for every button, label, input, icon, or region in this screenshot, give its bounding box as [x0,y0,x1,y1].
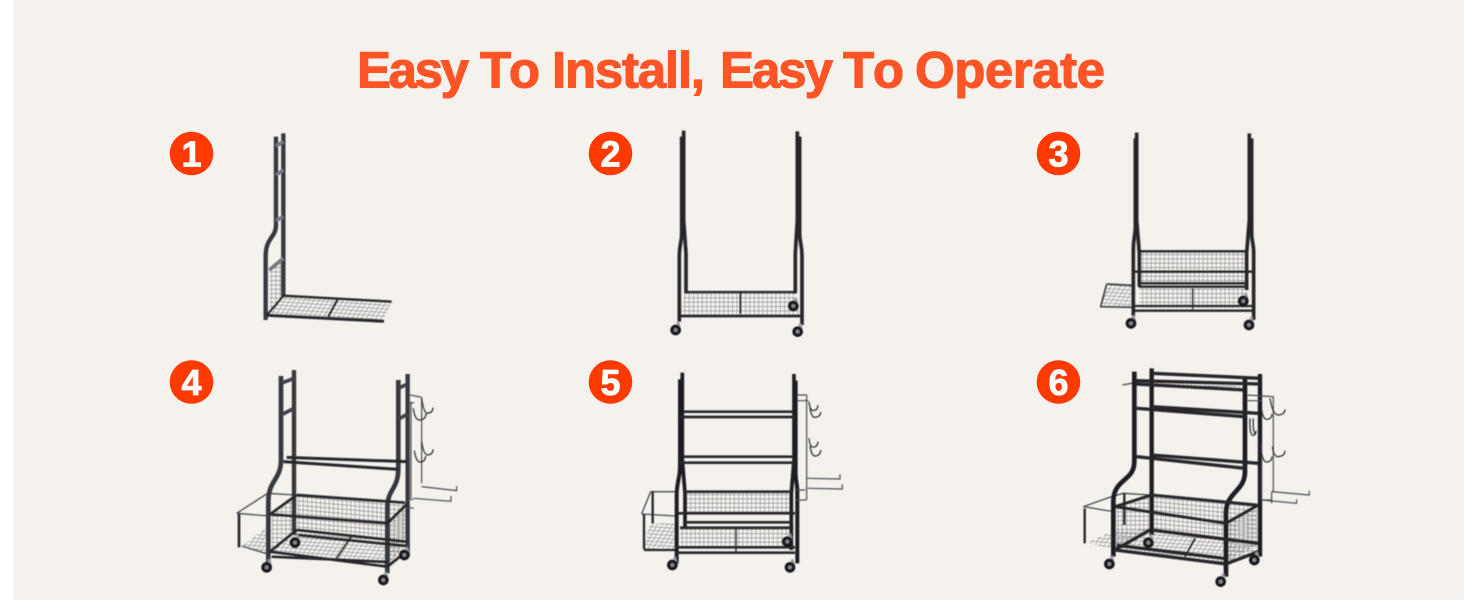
step 5 number badge: 5 [600,362,621,403]
step 6 number badge: 6 [1048,362,1069,403]
step 6 illustration: fully assembled rack [1083,368,1309,587]
step 1 number badge: 1 [181,134,202,174]
step 4 number badge: 4 [181,362,202,403]
step 2 number badge [589,132,632,175]
hook rail [797,395,842,500]
step 1 number badge [170,132,213,175]
step 4 illustration: rack with hook rail and side basket [237,370,457,585]
step 2 number badge: 2 [600,134,621,174]
step 2 illustration: both frames joined by base [670,131,803,337]
title: Easy [720,41,834,98]
step 3 number badge: 3 [1048,134,1069,174]
title: To [480,41,540,98]
title [357,41,1105,98]
step 6 number badge [1037,360,1080,404]
hook rail [1247,395,1309,503]
step 5 illustration: rack with two shelves, front view [642,373,842,573]
title: Operate [915,41,1105,98]
title: Install, [552,41,705,98]
step 1 illustration: side frame with base mesh [266,133,392,321]
title: Easy [357,41,470,98]
hook rail [408,395,457,508]
step 3 illustration: rear basket and folded side basket [1101,133,1254,330]
step 5 number badge [589,360,632,404]
title: To [843,41,904,98]
step 4 number badge [170,360,213,404]
step 3 number badge [1037,132,1080,175]
